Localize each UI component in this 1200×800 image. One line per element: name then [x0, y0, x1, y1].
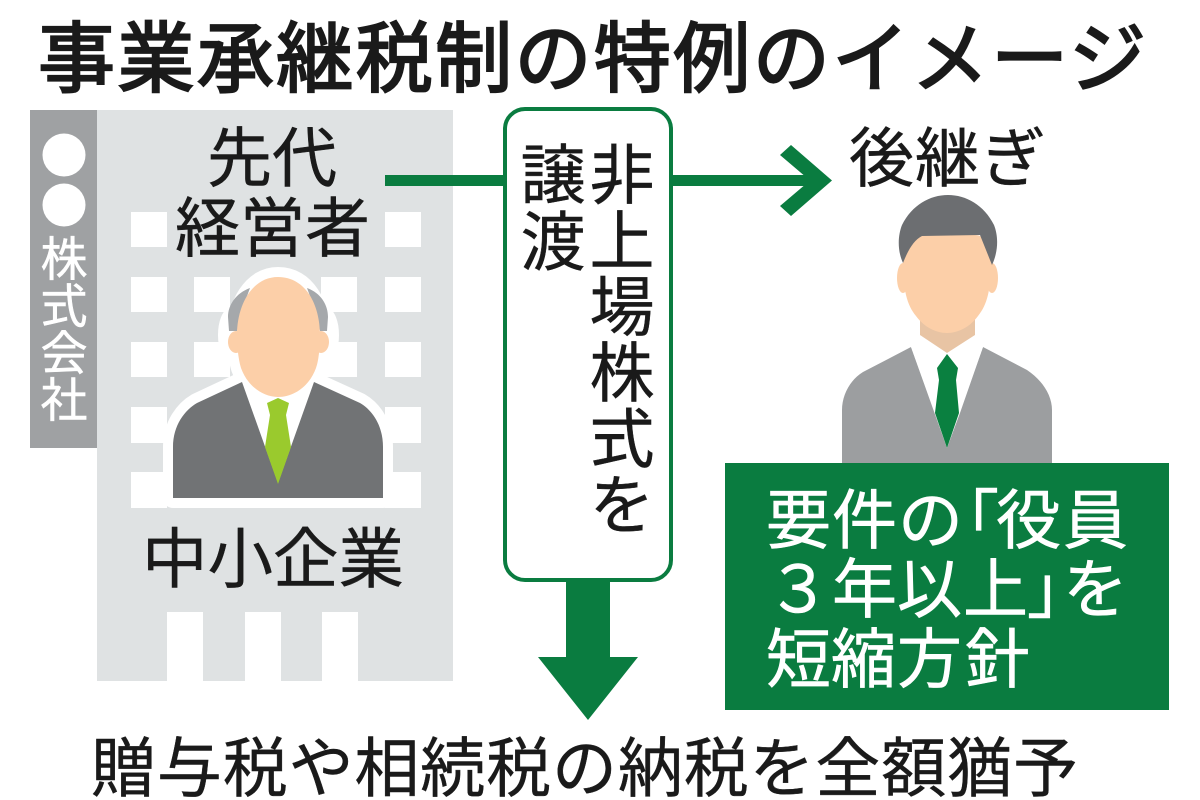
- label: previous owner: 先代: [207, 122, 337, 195]
- box: unlisted share transfer: 譲: [520, 139, 586, 212]
- company label: ●●株式会社: 株: [40, 233, 88, 286]
- callout: requirement shortened: 要件の「役員: [766, 484, 1128, 557]
- box: unlisted share transfer: 非: [589, 139, 655, 212]
- box: unlisted share transfer: を: [589, 469, 655, 542]
- box: unlisted share transfer: [505, 109, 671, 580]
- arrow: transfer: [385, 145, 832, 216]
- callout: requirement shortened: ３年以上」を: [766, 553, 1128, 626]
- company label: ●●株式会社: 社: [40, 374, 88, 427]
- label: successor: 後継ぎ: [849, 122, 1046, 195]
- box: unlisted share transfer: 式: [589, 403, 655, 476]
- callout: requirement shortened: 短縮方針: [766, 623, 1030, 696]
- box: unlisted share transfer: 株: [589, 337, 655, 410]
- company label: ●●株式会社: [30, 110, 97, 448]
- callout: requirement shortened: [725, 463, 1169, 710]
- label: previous owner: [175, 122, 370, 265]
- box: unlisted share transfer: 渡: [520, 206, 586, 279]
- box: unlisted share transfer: 場: [589, 271, 655, 344]
- arrow: down to tax deferral: [538, 575, 638, 720]
- box: unlisted share transfer: 上: [589, 205, 655, 278]
- building: small business: [97, 110, 453, 681]
- figure: previous owner: [173, 277, 383, 498]
- company label: ●●株式会社: 会: [40, 327, 88, 380]
- label: previous owner: 経営者: [175, 192, 370, 265]
- company label: ●●株式会社: 式: [40, 280, 88, 333]
- label: small and medium enterprise: 中小企業: [142, 523, 404, 596]
- title: 事業承継税制の特例のイメージ: [38, 17, 1146, 103]
- figure: successor: [842, 195, 1052, 463]
